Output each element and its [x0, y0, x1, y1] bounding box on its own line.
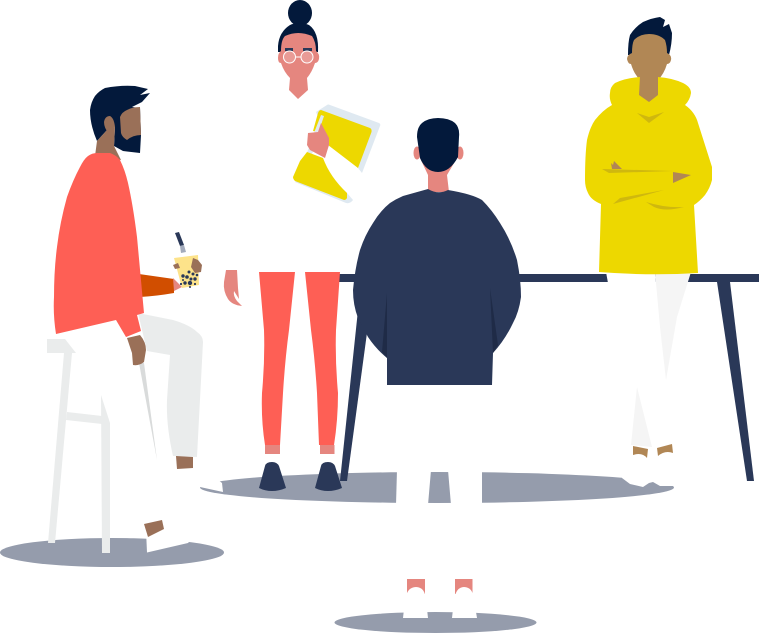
near shoe	[146, 530, 200, 552]
navy sweater	[353, 189, 521, 385]
bubble tea cup	[174, 255, 199, 288]
trousers shade	[655, 272, 691, 380]
sock far foot	[176, 456, 193, 469]
far shoe	[200, 470, 223, 492]
person: man seen from behind	[353, 118, 521, 618]
hoodie	[585, 77, 712, 274]
socks	[633, 444, 673, 458]
face	[120, 107, 141, 140]
face	[627, 34, 671, 80]
table	[335, 274, 759, 481]
trousers over shadow	[396, 470, 482, 505]
far leg	[138, 313, 203, 457]
socks	[407, 579, 472, 594]
cuffs	[265, 445, 334, 454]
orange arm	[139, 274, 174, 297]
neck	[639, 76, 658, 102]
face and neck	[278, 33, 319, 99]
neck	[420, 158, 457, 192]
tapioca pearls	[180, 270, 198, 288]
hoodie folds	[602, 112, 684, 210]
shoes	[403, 587, 477, 618]
floor shadows	[0, 472, 674, 633]
right hand	[673, 172, 691, 183]
hair bun	[288, 0, 312, 26]
wrist	[173, 278, 182, 291]
person: woman with folder	[224, 0, 380, 491]
stool	[47, 339, 110, 553]
folder back	[295, 104, 380, 203]
hair	[278, 23, 318, 52]
white trousers gap on table	[606, 272, 656, 283]
sweater folds	[382, 288, 498, 358]
near sock	[144, 520, 164, 537]
red sweater	[54, 153, 144, 337]
hair and beard	[90, 86, 150, 153]
left hand	[224, 270, 242, 306]
lower hand	[127, 335, 146, 365]
ears	[414, 146, 464, 160]
pencil	[314, 115, 324, 134]
trouser shadow sliver	[139, 363, 157, 460]
hand on cup	[173, 258, 202, 273]
person: man in yellow hoodie	[585, 17, 712, 487]
straw	[175, 232, 184, 246]
hand	[307, 123, 329, 158]
eyebrows	[285, 48, 312, 51]
leggings	[259, 272, 295, 445]
left fingers	[611, 161, 622, 169]
shoes	[622, 462, 676, 487]
folder front	[293, 110, 372, 200]
ear	[104, 116, 115, 131]
glasses	[284, 51, 313, 63]
neck	[95, 127, 121, 160]
hair	[417, 118, 459, 172]
hair	[628, 17, 672, 55]
person: seated man	[54, 86, 223, 552]
shoes	[259, 462, 342, 491]
